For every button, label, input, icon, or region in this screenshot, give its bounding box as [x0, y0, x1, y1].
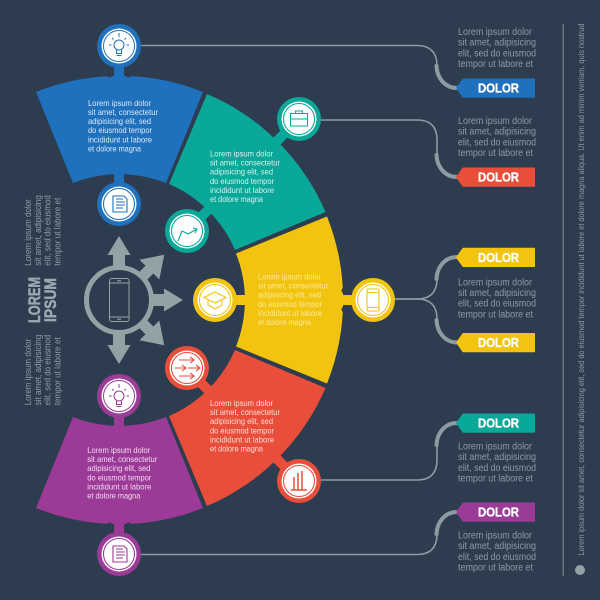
heading: LOREM IPSUM [25, 277, 60, 323]
text block: right 3: sit amet, adipisicing [458, 288, 536, 299]
connector: blue top to label [141, 46, 457, 88]
panel: purple segment [36, 412, 203, 538]
panel: teal segment: do eiusmod tempor [210, 176, 274, 186]
icon: graduation cap yellow [193, 278, 237, 322]
text block: right 1: sit amet, adipisicing [458, 38, 536, 49]
connector: red to teal label [321, 423, 457, 480]
side rule [562, 24, 564, 576]
text block: left upper [23, 195, 62, 266]
panel: yellow segment: do eiusmod tempor [258, 299, 322, 309]
text block: right 2: sit amet, adipisicing [458, 127, 536, 138]
panel: yellow segment: adipisicing elit, sed [258, 290, 321, 300]
heading: LOREM IPSUM: LOREM [25, 277, 44, 323]
text block: right 5: elit, sed do eiusmod [458, 552, 536, 563]
panel: blue segment: adipisicing elit, sed [88, 116, 151, 126]
panel: purple segment: do eiusmod tempor [87, 472, 152, 482]
panel: blue segment: do eiusmod tempor [88, 125, 152, 135]
label: blue DOLOR [456, 79, 534, 97]
text block: right 5: Lorem ipsum dolor [458, 530, 533, 542]
panel: red segment: sit amet, consectetur [210, 407, 280, 417]
panel: teal segment: Lorem ipsum dolor [210, 148, 273, 158]
text block: right 1: elit, sed do eiusmod [458, 48, 536, 59]
text block: right 4 [458, 442, 536, 484]
panel: red segment: et dolore magna [210, 444, 263, 454]
central icon: phone with arrows [86, 236, 183, 364]
connector: teal to red label [321, 120, 457, 177]
panel: blue segment: et dolore magna [88, 143, 141, 153]
text block: right 5: sit amet, adipisicing [458, 541, 536, 552]
text block: left lower: elit, sed do eiusmod [43, 335, 53, 405]
text block: left lower [23, 335, 62, 405]
icon: trend arrow teal [165, 209, 209, 253]
icon: light bulb blue [97, 24, 141, 68]
text block: left lower: Lorem ipsum dolor [23, 339, 33, 405]
icon: briefcase teal [277, 97, 321, 141]
text block: right 3 [458, 277, 536, 320]
icon: document blue [97, 182, 141, 226]
text block: right 5 [458, 530, 536, 574]
connector: purple to purple label [141, 512, 457, 554]
text block: right 4: sit amet, adipisicing [458, 452, 536, 463]
text block: right 5: tempor ut labore et [458, 562, 533, 574]
text block: left upper: tempor ut labore et [52, 197, 62, 266]
text block: right 1: Lorem ipsum dolor [458, 27, 533, 38]
text block: right 1: tempor ut labore et [458, 59, 533, 70]
label: yellow DOLOR lower: DOLOR [478, 335, 520, 350]
text block: right 3: elit, sed do eiusmod [458, 299, 536, 310]
text block: right 2 [458, 116, 536, 159]
label: teal DOLOR: DOLOR [478, 416, 520, 430]
text block: right 3: Lorem ipsum dolor [458, 277, 533, 288]
panel: blue segment: incididunt ut labore [88, 134, 152, 144]
text block: left lower: sit amet, adipisicing [33, 335, 43, 405]
text block: right 2: Lorem ipsum dolor [458, 116, 533, 127]
connector: yellow to upper yellow label [395, 257, 457, 299]
panel: red segment [169, 350, 326, 506]
panel: red segment: do eiusmod tempor [210, 425, 274, 435]
label: yellow DOLOR upper: DOLOR [478, 250, 520, 265]
panel: blue segment: Lorem ipsum dolor [88, 98, 151, 108]
label: yellow DOLOR upper [456, 248, 534, 266]
panel: teal segment: incididunt ut labore [210, 185, 274, 195]
panel: purple segment: sit amet, consectetur [87, 454, 158, 464]
text block: left upper: elit, sed do eiusmod [43, 195, 53, 266]
connector: yellow to lower yellow label [395, 299, 457, 342]
panel: red segment: Lorem ipsum dolor [210, 398, 273, 408]
label: purple DOLOR: DOLOR [478, 504, 520, 520]
text block: left lower: tempor ut labore et [52, 337, 62, 405]
dot marker [575, 565, 585, 575]
panel: yellow segment: Lorem ipsum dolor [258, 272, 321, 282]
icon: light bulb purple [97, 374, 141, 418]
panel: blue segment [36, 62, 203, 188]
text block: left upper: sit amet, adipisicing [33, 195, 43, 266]
panel: yellow segment: sit amet, consectetur [258, 281, 328, 291]
text block: right 1 [458, 27, 536, 70]
panel: yellow segment: et dolore magna [258, 317, 311, 327]
text block: left upper: Lorem ipsum dolor [23, 199, 33, 266]
text block: right 2: elit, sed do eiusmod [458, 137, 536, 148]
icon: arrows red [165, 346, 209, 390]
panel: purple segment: incididunt ut labore [87, 481, 152, 491]
icon: phone yellow [351, 278, 395, 322]
panel: red segment: incididunt ut labore [210, 434, 274, 444]
icon: bar chart red [277, 459, 321, 503]
panel: purple segment: Lorem ipsum dolor [87, 445, 151, 455]
label: blue DOLOR: DOLOR [478, 81, 520, 96]
text block: right 4: tempor ut labore et [458, 474, 533, 484]
label: yellow DOLOR lower [456, 334, 534, 352]
panel: yellow segment: incididunt ut labore [258, 308, 322, 318]
panel: blue segment: sit amet, consectetur [88, 107, 158, 117]
text block: right 4: Lorem ipsum dolor [458, 442, 533, 452]
panel: teal segment [169, 94, 326, 250]
label: purple DOLOR [456, 503, 534, 521]
panel: teal segment: et dolore magna [210, 194, 263, 204]
text block: right 2: tempor ut labore et [458, 148, 533, 159]
panel: teal segment: sit amet, consectetur [210, 158, 280, 168]
panel: teal segment: adipisicing elit, sed [210, 167, 273, 177]
heading: LOREM IPSUM: IPSUM [41, 278, 60, 322]
text block: right 4: elit, sed do eiusmod [458, 463, 536, 474]
panel: red segment: adipisicing elit, sed [210, 416, 273, 426]
icon: document purple [97, 532, 141, 576]
panel: purple segment: adipisicing elit, sed [87, 463, 151, 473]
panel: purple segment: et dolore magna [87, 490, 141, 500]
label: teal DOLOR [456, 414, 534, 432]
label: red DOLOR [456, 168, 534, 186]
panel: yellow segment [230, 216, 358, 384]
label: red DOLOR: DOLOR [478, 170, 520, 185]
text block: right 3: tempor ut labore et [458, 309, 533, 320]
